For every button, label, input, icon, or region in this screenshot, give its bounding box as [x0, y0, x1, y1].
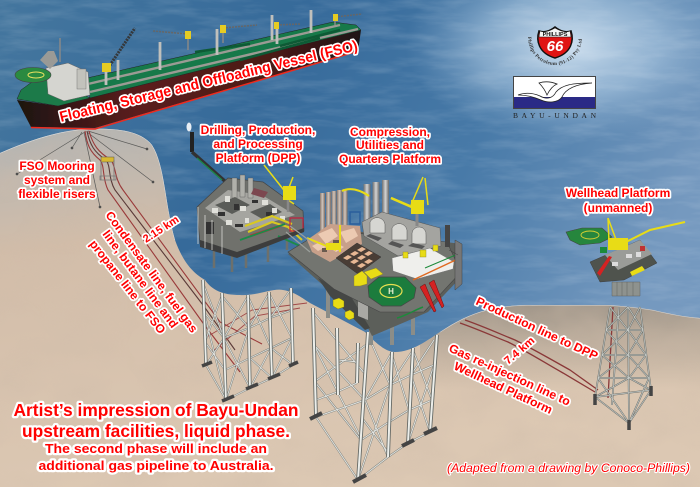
DPP jacket [202, 280, 298, 401]
label: condensate lines: propane line to FSO [87, 237, 168, 336]
CUQ topsides [286, 177, 462, 345]
lifeboat [597, 256, 612, 276]
pipelines near DPP [205, 303, 307, 352]
label: DPP: Drilling, Production, [201, 123, 315, 137]
jacket feet [595, 386, 651, 430]
accommodation block [40, 38, 90, 101]
label: condensate lines: line, butane line and [100, 227, 181, 331]
helideck: H [388, 287, 394, 296]
subtitle line 1: The second phase will include an [45, 442, 267, 456]
decks [590, 240, 657, 282]
peach modules [307, 224, 362, 262]
walkway to DPP [286, 226, 314, 252]
label: DPP: Platform (DPP) [216, 151, 300, 165]
label: production line: Production line to DPP [474, 294, 600, 363]
label: FSO mooring: FSO Mooring [19, 159, 95, 173]
stern deck [17, 79, 90, 106]
helideck [368, 277, 416, 306]
coloured pipework [245, 216, 302, 240]
yellow pipe [342, 189, 410, 206]
FSO label: Floating, Storage and Offloading Vessel (FSO) [58, 37, 359, 126]
bird [518, 82, 592, 102]
label: FSO mooring [18, 159, 96, 201]
small yellow boxes [333, 298, 354, 320]
jacket pads [202, 362, 298, 401]
mooring system and risers [16, 131, 262, 372]
deck pipes [88, 25, 358, 92]
legs [214, 232, 287, 272]
lower deck shadow [200, 228, 304, 258]
title line 2: upstream facilities, liquid phase. [22, 421, 290, 441]
label: gas re-injection: Wellhead Platform [452, 359, 555, 417]
logo: Phillips 66 [528, 26, 582, 66]
roof module [336, 243, 381, 274]
module body [197, 178, 304, 255]
orange and green walkways [413, 258, 460, 280]
yellow deck cranes [102, 14, 362, 72]
logo box [514, 76, 596, 108]
label: DPP: and Processing [213, 137, 303, 151]
south crane [307, 225, 340, 252]
riser manifold [100, 157, 116, 180]
yellow crane [264, 165, 296, 212]
ring text: Phillips Petroleum (91-12) Pty Ltd [528, 36, 582, 66]
seabed [0, 128, 700, 487]
DPP topsides [186, 122, 304, 272]
side tower [445, 225, 462, 290]
CUQ jacket [310, 308, 437, 482]
label: 2.15 km: 2.15 km [141, 214, 181, 246]
crane [608, 218, 685, 250]
main deck [87, 22, 361, 98]
substructure [288, 228, 462, 336]
shield number: 66 [547, 38, 564, 55]
title line 1: Artist’s impression of Bayu-Undan [14, 400, 298, 420]
label: FSO mooring: flexible risers [18, 187, 96, 201]
turbines [362, 212, 441, 256]
kingposts [106, 10, 311, 85]
green and red modules [600, 247, 607, 253]
label: compression platform: Utilities and [356, 138, 424, 152]
ship helideck [15, 68, 51, 82]
subtitle line 2: additional gas pipeline to Australia. [38, 459, 274, 473]
helideck [566, 228, 612, 245]
lattice crane [108, 28, 135, 68]
north crane [391, 177, 428, 226]
label: compression platform [339, 125, 441, 166]
shield text: PHILLIPS [543, 32, 568, 38]
title block [14, 400, 298, 473]
label: wellhead platform: Wellhead Platform [566, 186, 670, 200]
logo text: BAYU-UNDAN [513, 111, 597, 120]
label: 7.4 km: 7.4 km [502, 335, 537, 367]
hull [17, 30, 361, 128]
wellhead jacket [595, 307, 651, 430]
upper machinery [205, 190, 295, 232]
flexible riser lines [85, 131, 262, 372]
side truss [198, 207, 222, 254]
column leg [328, 262, 413, 345]
yellow modules [354, 245, 438, 286]
lower cage [612, 282, 640, 296]
wellhead platform topside [566, 218, 685, 296]
logo: Bayu-Undan [513, 76, 597, 120]
label: wellhead platform: (unmanned) [584, 201, 652, 215]
label: wellhead platform [566, 186, 670, 215]
flare boom [186, 122, 227, 183]
label: compression platform: Quarters Platform [339, 152, 441, 166]
white module [392, 248, 454, 279]
label: condensate lines: Condensate line, fuel gas [103, 209, 201, 336]
FSO vessel [15, 10, 362, 129]
label: gas re-injection: Gas re-injection line to [447, 341, 573, 409]
mooring lines [16, 131, 154, 208]
blue fixture [350, 212, 360, 224]
label: FSO mooring: system and [24, 173, 90, 187]
wellhead pipelines [460, 307, 613, 398]
yellow box [630, 266, 645, 276]
credit: (Adapted from a drawing by Conoco-Phillips) [447, 463, 690, 475]
waterline [31, 51, 358, 129]
exhaust stacks [320, 180, 389, 231]
shield [538, 27, 572, 58]
main deck [288, 230, 461, 312]
lifeboats [420, 280, 444, 312]
label: DPP [201, 123, 315, 165]
label: compression platform: Compression, [350, 125, 430, 139]
jacket pads [310, 413, 437, 482]
